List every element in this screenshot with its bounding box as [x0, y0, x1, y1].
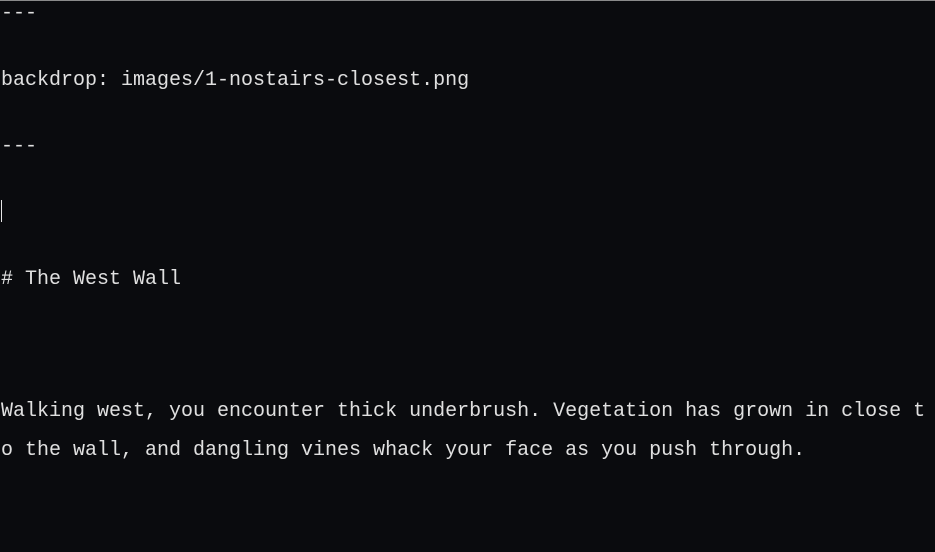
body text block: [1, 400, 925, 462]
frontmatter closing delimiter: ---: [1, 135, 37, 158]
frontmatter opening delimiter: ---: [1, 2, 37, 25]
body text line 1: Walking west, you encounter thick underbrush. Vegetation has grown in close t: [1, 400, 925, 423]
body text line 2: o the wall, and dangling vines whack your face as you push through.: [1, 439, 805, 462]
heading: The West Wall: # The West Wall: [1, 268, 181, 291]
frontmatter backdrop line: backdrop: images/1-nostairs-closest.png: [1, 69, 469, 92]
text cursor: [1, 200, 2, 222]
